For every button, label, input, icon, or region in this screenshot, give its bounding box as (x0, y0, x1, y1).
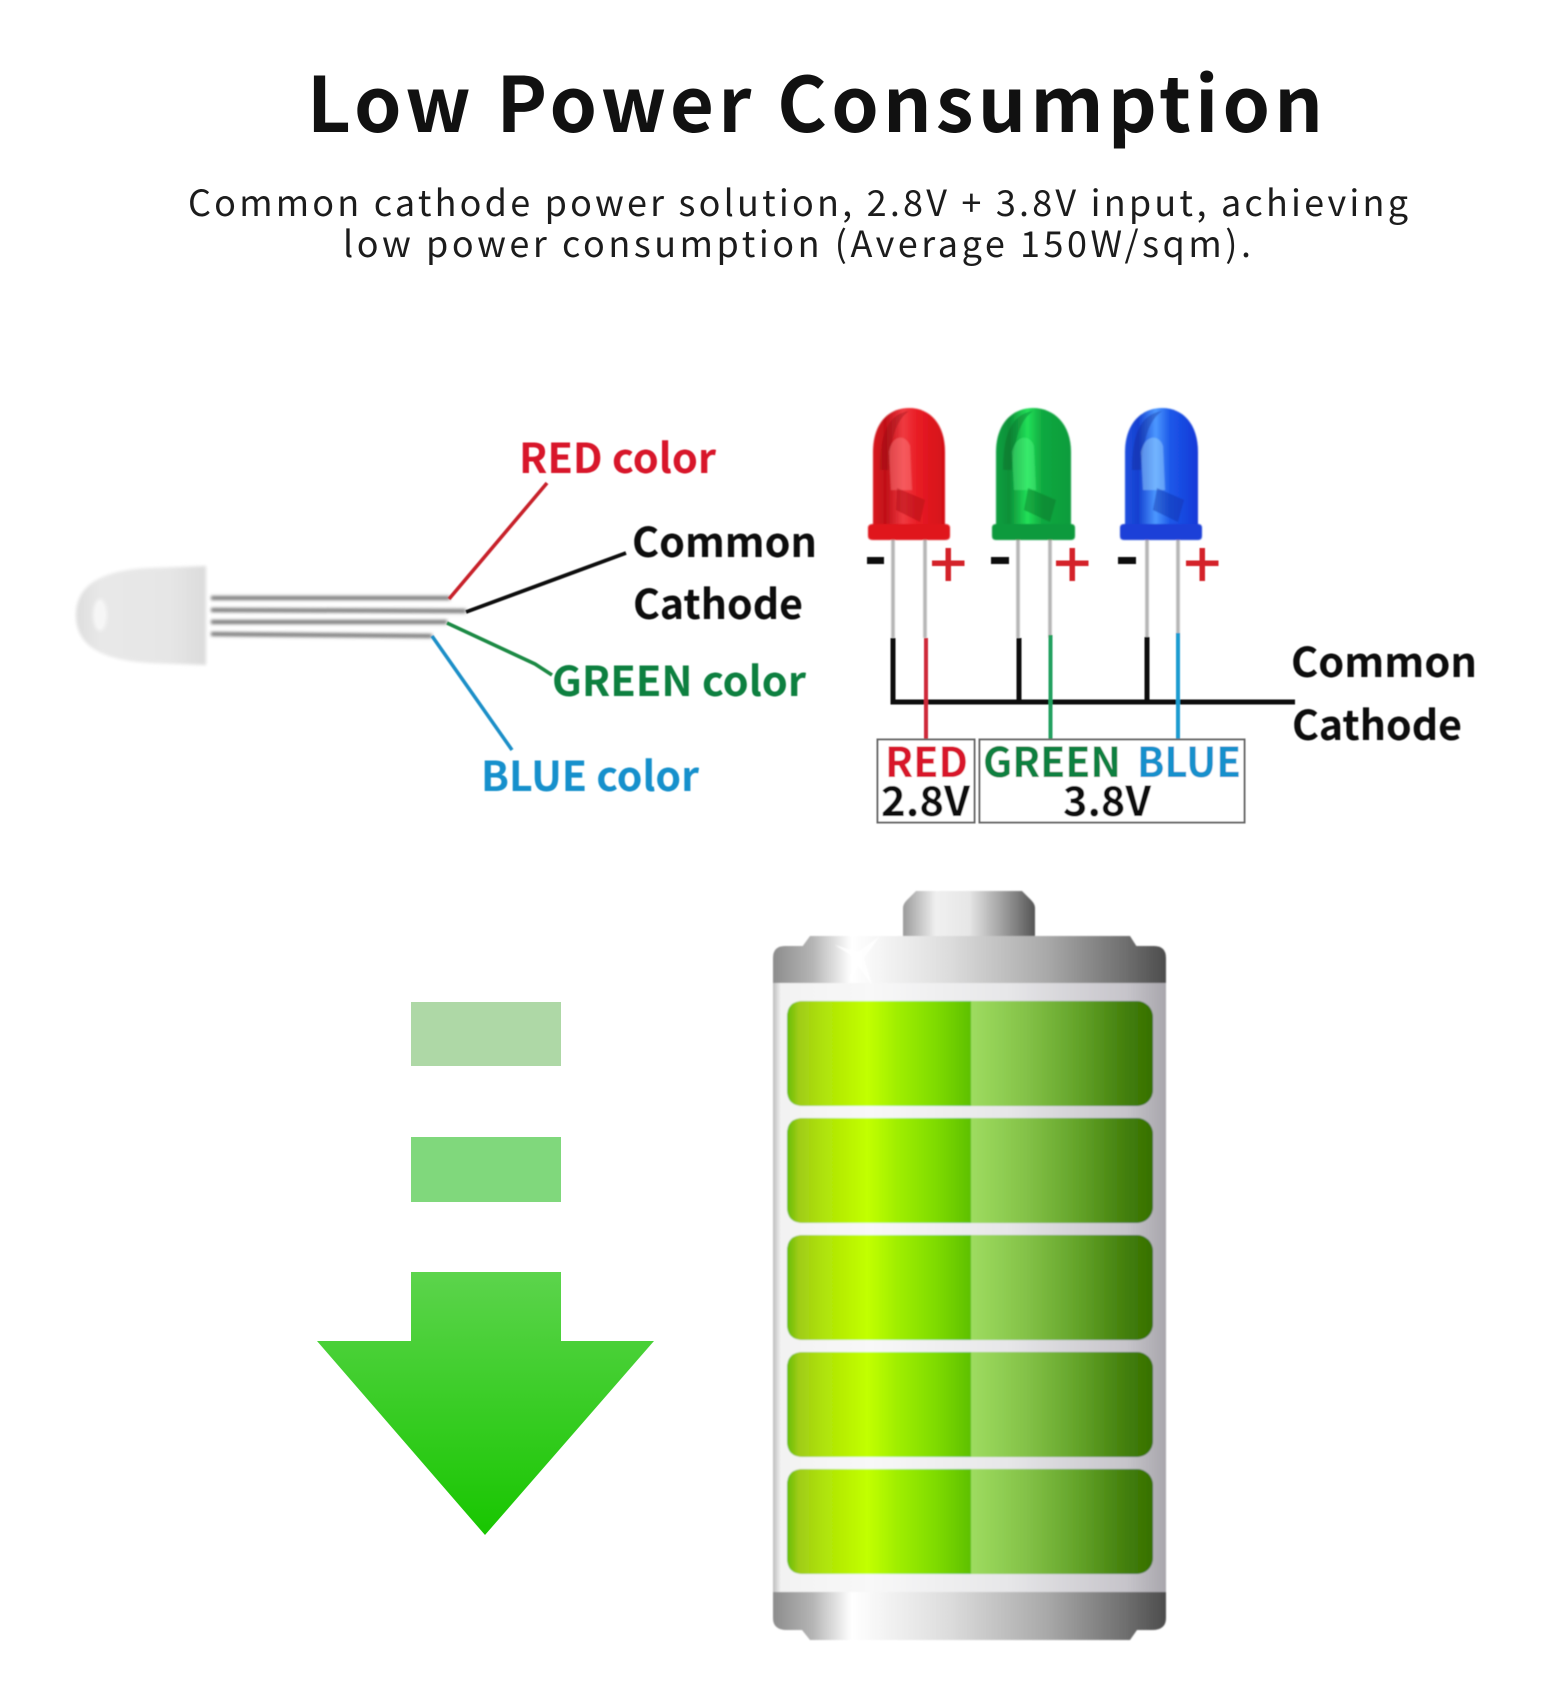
icon: diffused four-pin LED (76, 566, 466, 665)
icon: green LED (992, 408, 1075, 638)
top metal band (773, 946, 1166, 983)
label: GREEN color: GREEN color (552, 648, 806, 708)
label: Common Cathode: Common (632, 509, 817, 569)
green wire (1048, 635, 1052, 739)
leader line: red (449, 483, 547, 599)
faded bar two (411, 1137, 561, 1202)
label: Common Cathode (632, 509, 817, 631)
blue wire (1176, 633, 1180, 739)
faded bar one (411, 1002, 561, 1066)
icon: battery (773, 891, 1166, 1640)
leader line: green (447, 623, 552, 675)
charge cell 2 (787, 1118, 1153, 1223)
voltage box: green and blue 3.8V (980, 729, 1244, 828)
charge cell 5 (787, 1469, 1153, 1574)
voltage box: green and blue 3.8V: BLUE (1137, 729, 1241, 789)
leader line: common cathode (466, 553, 626, 612)
panel: RGB LED circuit diagram (867, 408, 1477, 828)
polarity signs: minus (867, 557, 1136, 564)
voltage box: green and blue 3.8V: GREEN (983, 729, 1121, 789)
icon: green down arrow (317, 1002, 654, 1535)
panel: four-pin LED wiring diagram (76, 425, 817, 803)
bottom metal band (773, 1592, 1166, 1630)
specular glint (835, 936, 880, 985)
subtitle text: low power consumption (Average 150W/sqm). (343, 216, 1251, 268)
voltage box: red 2.8V (878, 729, 974, 828)
red wire (924, 638, 928, 739)
label: Common Cathode (1291, 629, 1477, 752)
subtitle text: Common cathode power solution, 2.8V + 3.8V input, achieving (188, 175, 1408, 227)
voltage box: red 2.8V: RED (885, 729, 968, 789)
arrow shape (317, 1272, 654, 1535)
label: Common Cathode: Cathode (1292, 692, 1462, 752)
voltage box: red 2.8V: 2.8V (881, 768, 971, 828)
title: Low Power Consumption (307, 44, 1323, 154)
label: BLUE color: BLUE color (481, 743, 699, 803)
leader line: blue (432, 636, 512, 750)
charge cell 3 (787, 1235, 1153, 1340)
voltage box: green and blue 3.8V: 3.8V (1063, 768, 1152, 828)
battery body (773, 980, 1166, 1595)
subtitle text (188, 175, 1408, 268)
polarity signs: plus (932, 548, 1218, 581)
label: Common Cathode: Cathode (633, 571, 803, 631)
label: RED color: RED color (519, 425, 716, 485)
top shoulder (802, 936, 1137, 947)
icon: blue LED (1120, 408, 1202, 638)
common cathode bus wiring (893, 637, 1295, 702)
label: Common Cathode: Common (1291, 629, 1477, 689)
charge cell 1 (787, 1001, 1153, 1106)
icon: red LED (868, 408, 950, 638)
battery terminal cap (903, 891, 1035, 936)
charge cell 4 (787, 1352, 1153, 1457)
bottom rim (802, 1630, 1137, 1640)
